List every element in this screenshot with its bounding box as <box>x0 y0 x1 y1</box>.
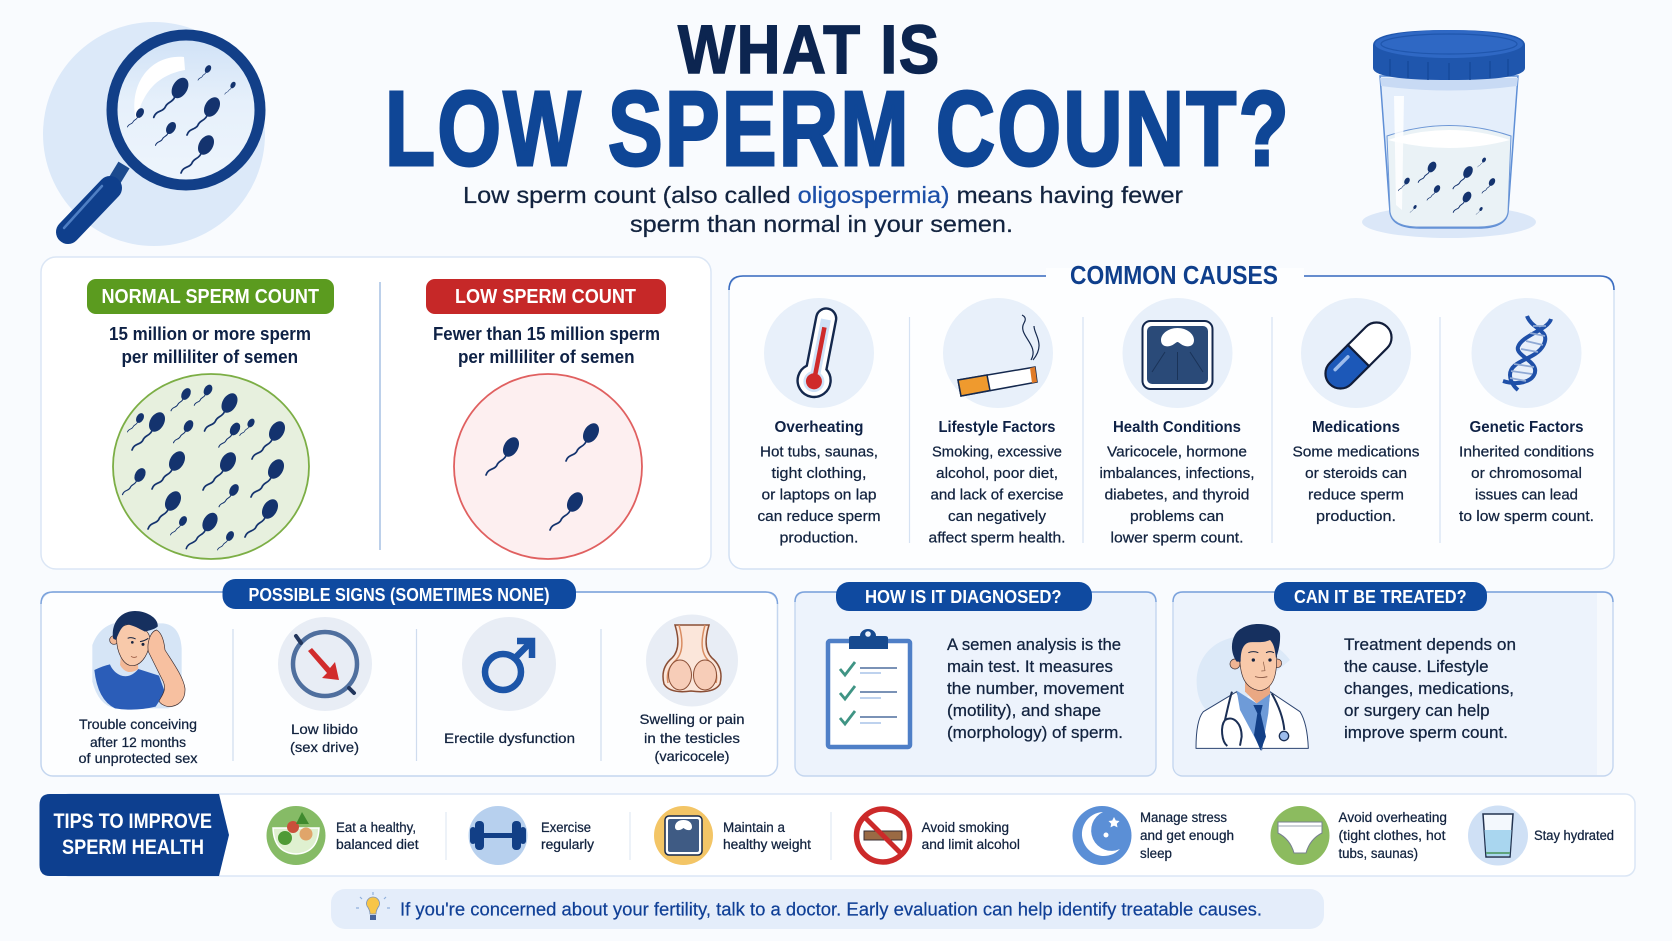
tip: stress and sleep: and get enough <box>1140 828 1234 843</box>
cause: health conditions: problems can <box>1130 508 1224 525</box>
text: treatment: improve sperm count. <box>1344 724 1508 742</box>
cause: overheating: or laptops on lap <box>762 487 876 504</box>
cause: medications <box>1292 298 1420 525</box>
sign: low libido: Low libido <box>291 721 358 737</box>
badge: treatment heading: CAN IT BE TREATED? <box>1294 586 1467 607</box>
text: diagnosis: (motility), and shape <box>947 702 1101 720</box>
tip: stay hydrated: Stay hydrated <box>1534 828 1614 843</box>
icon: doctor <box>1196 624 1308 751</box>
panel: common causes <box>729 260 1614 569</box>
subtitle: Low sperm count (also called oligospermia) means having fewer <box>463 182 1183 208</box>
cause: medications: Some medications <box>1292 444 1420 461</box>
cause: lifestyle factors: Lifestyle Factors <box>938 419 1056 436</box>
illustration: magnifying glass <box>43 22 265 246</box>
panel: tips to improve sperm health <box>40 794 1635 876</box>
panel: how is it diagnosed <box>795 582 1156 776</box>
cause: health conditions: lower sperm count. <box>1110 529 1244 546</box>
sign: swelling or pain: in the testicles <box>644 730 740 746</box>
banner: tips heading <box>40 794 229 876</box>
title: LOW SPERM COUNT? <box>385 70 1291 188</box>
cause: genetic factors: Genetic Factors <box>1470 419 1584 436</box>
tip: exercise <box>468 806 594 865</box>
cause: lifestyle factors: affect sperm health. <box>928 529 1066 546</box>
text: low definition: Fewer than 15 million sperm <box>433 324 660 344</box>
tip: exercise: Exercise <box>541 820 591 835</box>
cause: genetic factors <box>1459 298 1594 525</box>
cause: health conditions <box>1100 298 1254 546</box>
illustration: specimen jar <box>1362 30 1536 238</box>
badge: normal sperm count: NORMAL SPERM COUNT <box>102 286 319 308</box>
badge: low sperm count <box>426 279 666 314</box>
cause: lifestyle factors: and lack of exercise <box>930 487 1064 504</box>
cause: health conditions: Health Conditions <box>1113 419 1241 436</box>
badge: diagnosis heading <box>836 582 1092 611</box>
text: normal definition: per milliliter of semen <box>122 347 298 367</box>
title <box>385 11 1291 188</box>
cause: genetic factors: to low sperm count. <box>1459 508 1594 525</box>
text: diagnosis <box>947 636 1124 742</box>
cause: health conditions: diabetes, and thyroid <box>1104 487 1250 504</box>
tip: avoid overheating: tubs, saunas) <box>1338 846 1418 861</box>
sign: swelling or pain <box>640 614 744 764</box>
tip: healthy diet <box>266 806 419 865</box>
subtitle: sperm than normal in your semen. <box>630 211 1013 237</box>
tip: healthy weight: healthy weight <box>723 837 811 852</box>
tip: healthy weight: Maintain a <box>723 820 785 835</box>
diagram: normal sample <box>113 374 309 559</box>
tip: avoid smoking: Avoid smoking <box>922 820 1009 835</box>
tip: exercise: regularly <box>541 837 594 852</box>
text: low definition: per milliliter of semen <box>458 347 634 367</box>
sign: swelling or pain: (varicocele) <box>654 748 730 764</box>
text: treatment: the cause. Lifestyle <box>1344 658 1488 676</box>
badge: possible signs heading: POSSIBLE SIGNS (SOMETIMES NONE) <box>248 584 550 605</box>
text: treatment <box>1344 636 1516 742</box>
cause: lifestyle factors: Smoking, excessive <box>932 444 1062 461</box>
text: diagnosis: (morphology) of sperm. <box>947 724 1123 742</box>
title: WHAT IS <box>678 11 941 88</box>
cause: overheating <box>758 298 880 546</box>
tip: avoid overheating <box>1270 806 1447 865</box>
cause: lifestyle factors <box>928 298 1066 546</box>
icon: light bulb <box>356 892 390 920</box>
heading: common causes: COMMON CAUSES <box>1070 260 1278 290</box>
tip: stress and sleep <box>1072 806 1234 865</box>
text: diagnosis: main test. It measures <box>947 658 1113 676</box>
sign: erectile dysfunction <box>444 617 575 746</box>
tip: healthy diet: Eat a healthy, <box>336 820 416 835</box>
text: normal definition: 15 million or more sperm <box>109 324 311 344</box>
badge: normal sperm count <box>87 279 334 314</box>
badge: diagnosis heading: HOW IS IT DIAGNOSED? <box>865 586 1062 607</box>
cause: medications: reduce sperm <box>1308 487 1404 504</box>
text: low definition <box>433 324 660 367</box>
subtitle <box>463 182 1183 237</box>
cause: genetic factors: Inherited conditions <box>1459 444 1594 461</box>
tip: stress and sleep: Manage stress <box>1140 810 1227 825</box>
callout: talk to a doctor: If you're concerned about your fertility, talk to a doctor. Early evaluation can help identify treatable causes. <box>400 900 1262 920</box>
sign: trouble conceiving <box>78 611 198 766</box>
tip: avoid smoking <box>856 809 1020 862</box>
badge: treatment heading <box>1274 582 1487 611</box>
panel: can it be treated <box>1173 582 1613 776</box>
cause: genetic factors: or chromosomal <box>1471 465 1582 482</box>
cause: lifestyle factors: can negatively <box>948 508 1047 525</box>
tip: avoid overheating: (tight clothes, hot <box>1338 828 1446 843</box>
tip: healthy weight <box>654 806 811 865</box>
cause: overheating: can reduce sperm <box>758 508 880 525</box>
cause: genetic factors: issues can lead <box>1475 487 1578 504</box>
sign: low libido: (sex drive) <box>290 739 359 755</box>
tip: stress and sleep: sleep <box>1140 846 1172 861</box>
cause: overheating: production. <box>780 529 858 546</box>
tip: avoid smoking: and limit alcohol <box>922 837 1020 852</box>
cause: overheating: Overheating <box>774 419 864 436</box>
cause: health conditions: imbalances, infections, <box>1100 465 1254 482</box>
text: diagnosis: the number, movement <box>947 680 1124 698</box>
text: diagnosis: A semen analysis is the <box>947 636 1121 654</box>
text: normal definition <box>109 324 311 367</box>
panel: possible signs <box>41 579 778 776</box>
banner: tips heading: TIPS TO IMPROVE <box>54 809 212 833</box>
text: treatment: or surgery can help <box>1344 702 1490 720</box>
banner: tips heading: SPERM HEALTH <box>62 835 204 859</box>
badge: low sperm count: LOW SPERM COUNT <box>455 286 636 308</box>
tip: healthy diet: balanced diet <box>336 837 419 852</box>
cause: medications: Medications <box>1312 419 1400 436</box>
diagram: low sample <box>454 374 642 559</box>
tip: avoid overheating: Avoid overheating <box>1338 810 1447 825</box>
sign: swelling or pain: Swelling or pain <box>640 711 744 727</box>
text: treatment: changes, medications, <box>1344 680 1514 698</box>
cause: overheating: Hot tubs, saunas, <box>760 444 878 461</box>
text: treatment: Treatment depends on <box>1344 636 1516 654</box>
cause: medications: or steroids can <box>1305 465 1407 482</box>
cause: lifestyle factors: alcohol, poor diet, <box>936 465 1058 482</box>
tip: stay hydrated <box>1468 806 1614 866</box>
sign: trouble conceiving: Trouble conceiving <box>79 716 197 732</box>
cause: medications: production. <box>1316 508 1396 525</box>
cause: health conditions: Varicocele, hormone <box>1107 444 1247 461</box>
badge: possible signs heading <box>222 579 576 609</box>
panel: normal vs low comparison <box>41 257 711 569</box>
sign: trouble conceiving: of unprotected sex <box>78 750 198 766</box>
icon: clipboard <box>828 629 910 747</box>
sign: low libido <box>278 617 372 755</box>
sign: trouble conceiving: after 12 months <box>90 734 186 750</box>
sign: erectile dysfunction: Erectile dysfunction <box>444 730 575 746</box>
callout: talk to a doctor <box>331 889 1324 929</box>
cause: overheating: tight clothing, <box>772 465 866 482</box>
